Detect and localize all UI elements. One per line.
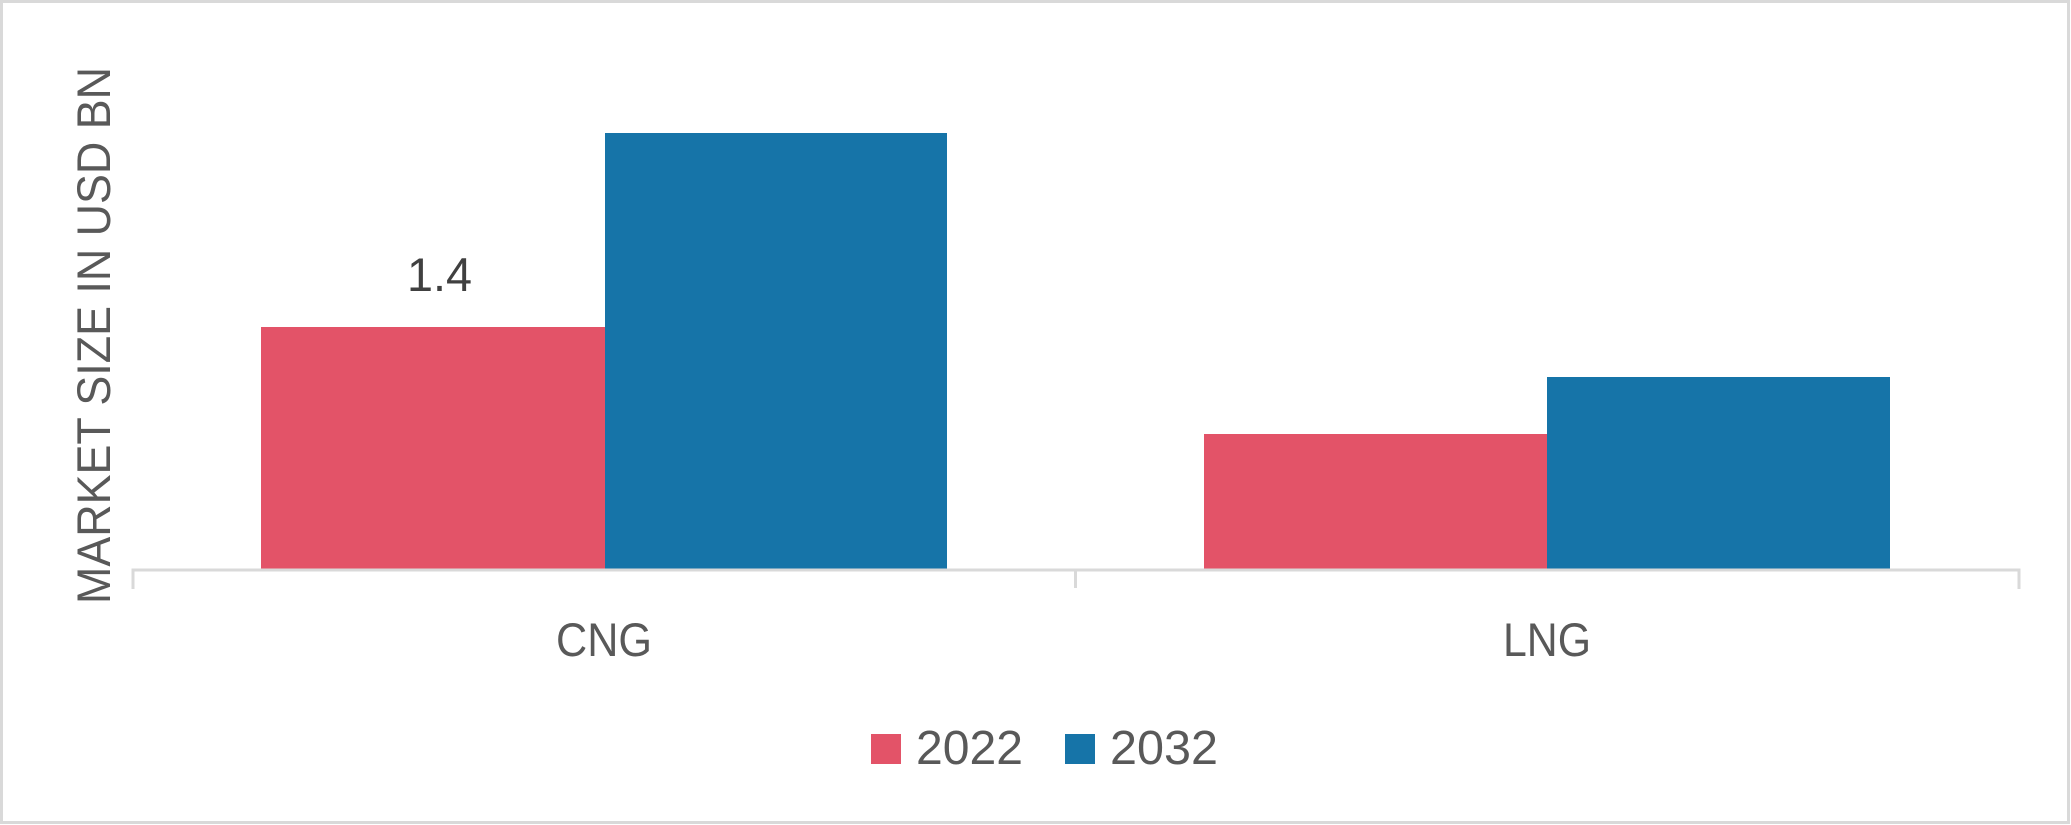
bar: CNG 2032 [605, 133, 947, 569]
data label: CNG 2022 value: 1.4 [407, 248, 472, 301]
legend label: 2032: 2032 [1110, 722, 1218, 775]
legend label: 2022: 2022 [916, 722, 1023, 775]
y-axis title: MARKET SIZE IN USD BN [67, 67, 120, 604]
legend swatch: 2022 [871, 734, 901, 764]
bar: CNG 2022 [261, 327, 605, 569]
category label: CNG: CNG [556, 613, 652, 666]
legend swatch: 2032 [1065, 734, 1095, 764]
x axis with tick marks [133, 570, 2019, 589]
bar: LNG 2032 [1547, 377, 1890, 569]
category label: LNG: LNG [1503, 613, 1591, 666]
bar: LNG 2022 [1204, 434, 1547, 569]
legend [871, 722, 1218, 775]
